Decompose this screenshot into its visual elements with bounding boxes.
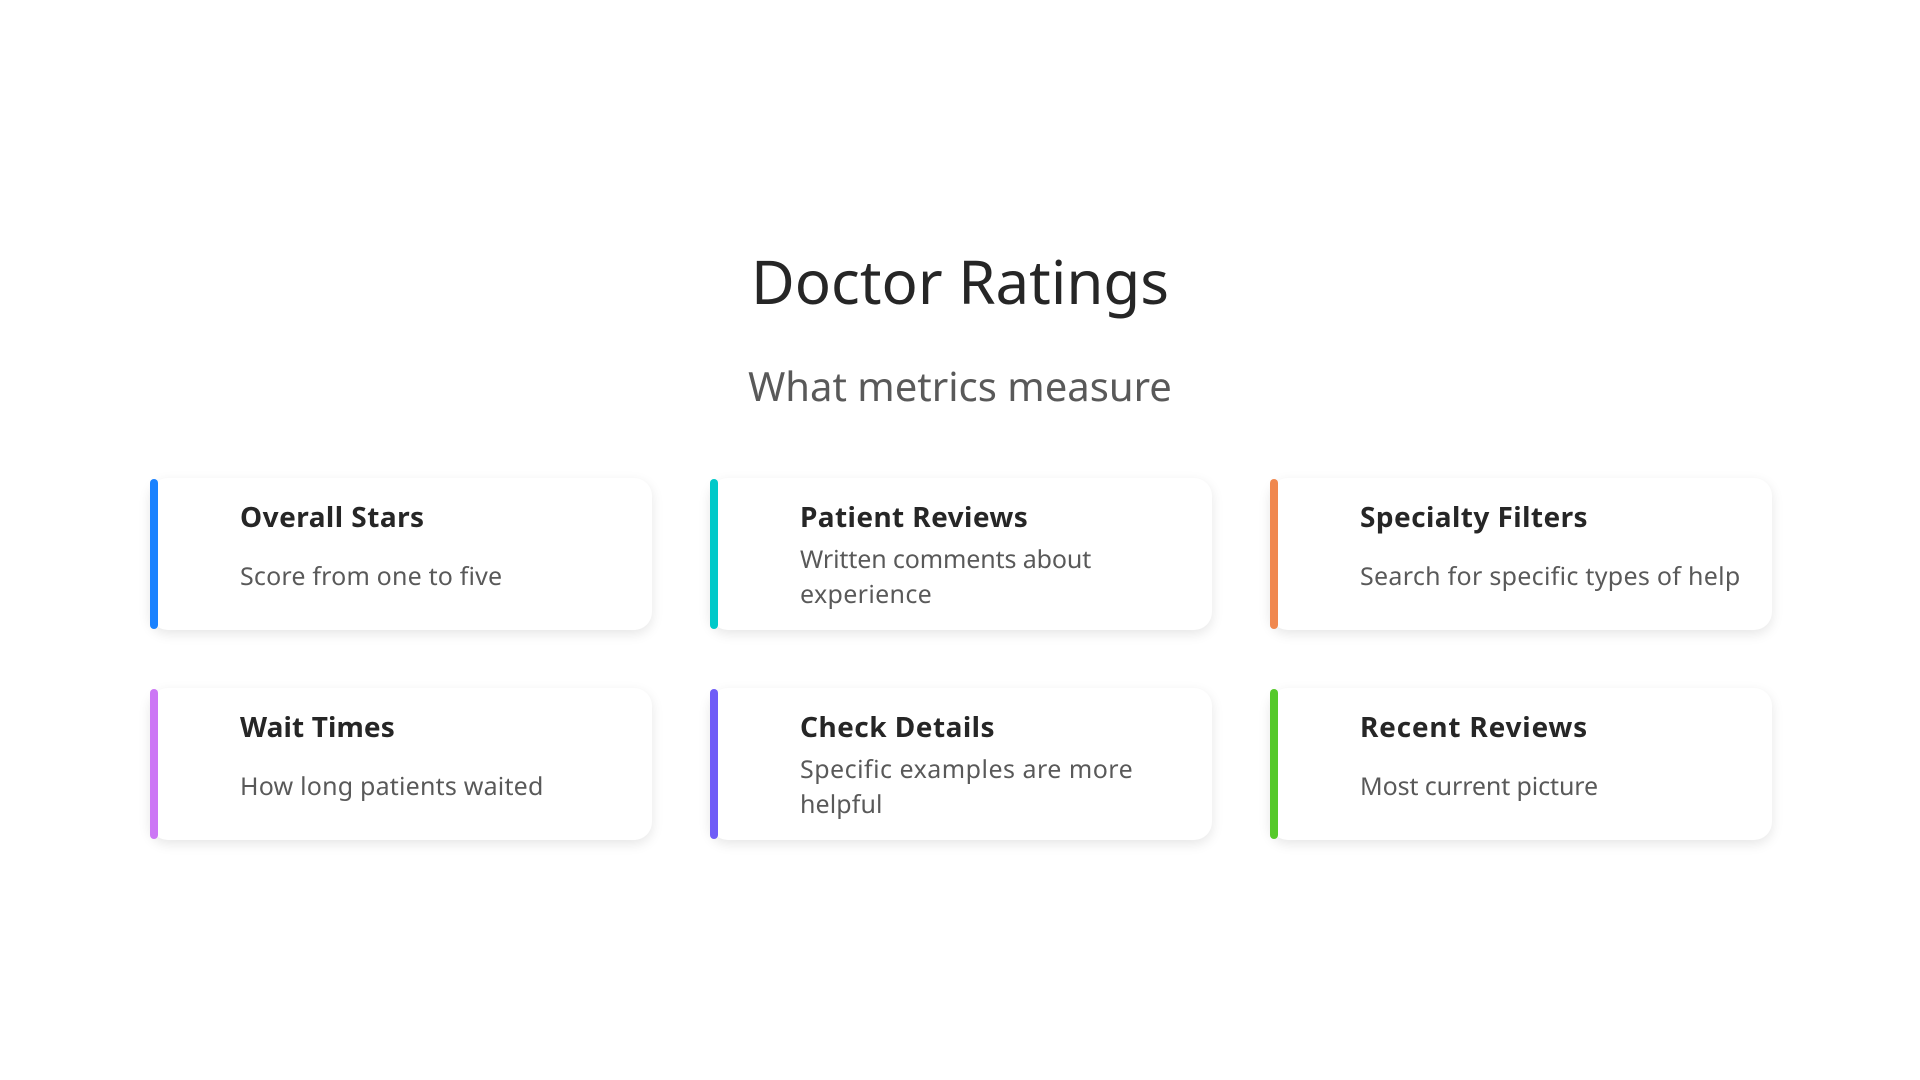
heading: specialty filters: Specialty Filters: [1360, 498, 1588, 536]
heading: wait times: Wait Times: [240, 708, 395, 746]
subtitle: What metrics measure: [748, 358, 1172, 413]
accent bar: orange: [1270, 479, 1278, 629]
accent bar: violet: [710, 689, 718, 839]
description: specialty filters: Search for specific types of help: [1360, 559, 1741, 593]
title: Doctor Ratings: [751, 240, 1169, 322]
heading: check details: Check Details: [800, 708, 995, 746]
description: overall stars: Score from one to five: [240, 559, 502, 593]
heading: patient reviews: Patient Reviews: [800, 498, 1028, 536]
description: wait times: How long patients waited: [240, 769, 544, 803]
accent bar: teal: [710, 479, 718, 629]
card: check details: [710, 688, 1212, 840]
description: patient reviews: Written comments about: [800, 542, 1091, 576]
description: check details: helpful: [800, 787, 883, 821]
heading: recent reviews: Recent Reviews: [1360, 708, 1588, 746]
card: wait times: [150, 688, 652, 840]
heading: overall stars: Overall Stars: [240, 498, 425, 536]
description: check details: [800, 752, 1133, 821]
description: patient reviews: experience: [800, 577, 932, 611]
description: patient reviews: [800, 542, 1091, 611]
card: overall stars: [150, 478, 652, 630]
accent bar: purple: [150, 689, 158, 839]
description: recent reviews: Most current picture: [1360, 769, 1598, 803]
accent bar: green: [1270, 689, 1278, 839]
card: patient reviews: [710, 478, 1212, 630]
accent bar: blue: [150, 479, 158, 629]
description: check details: Specific examples are more: [800, 752, 1133, 786]
card: recent reviews: [1270, 688, 1772, 840]
card: specialty filters: [1270, 478, 1772, 630]
